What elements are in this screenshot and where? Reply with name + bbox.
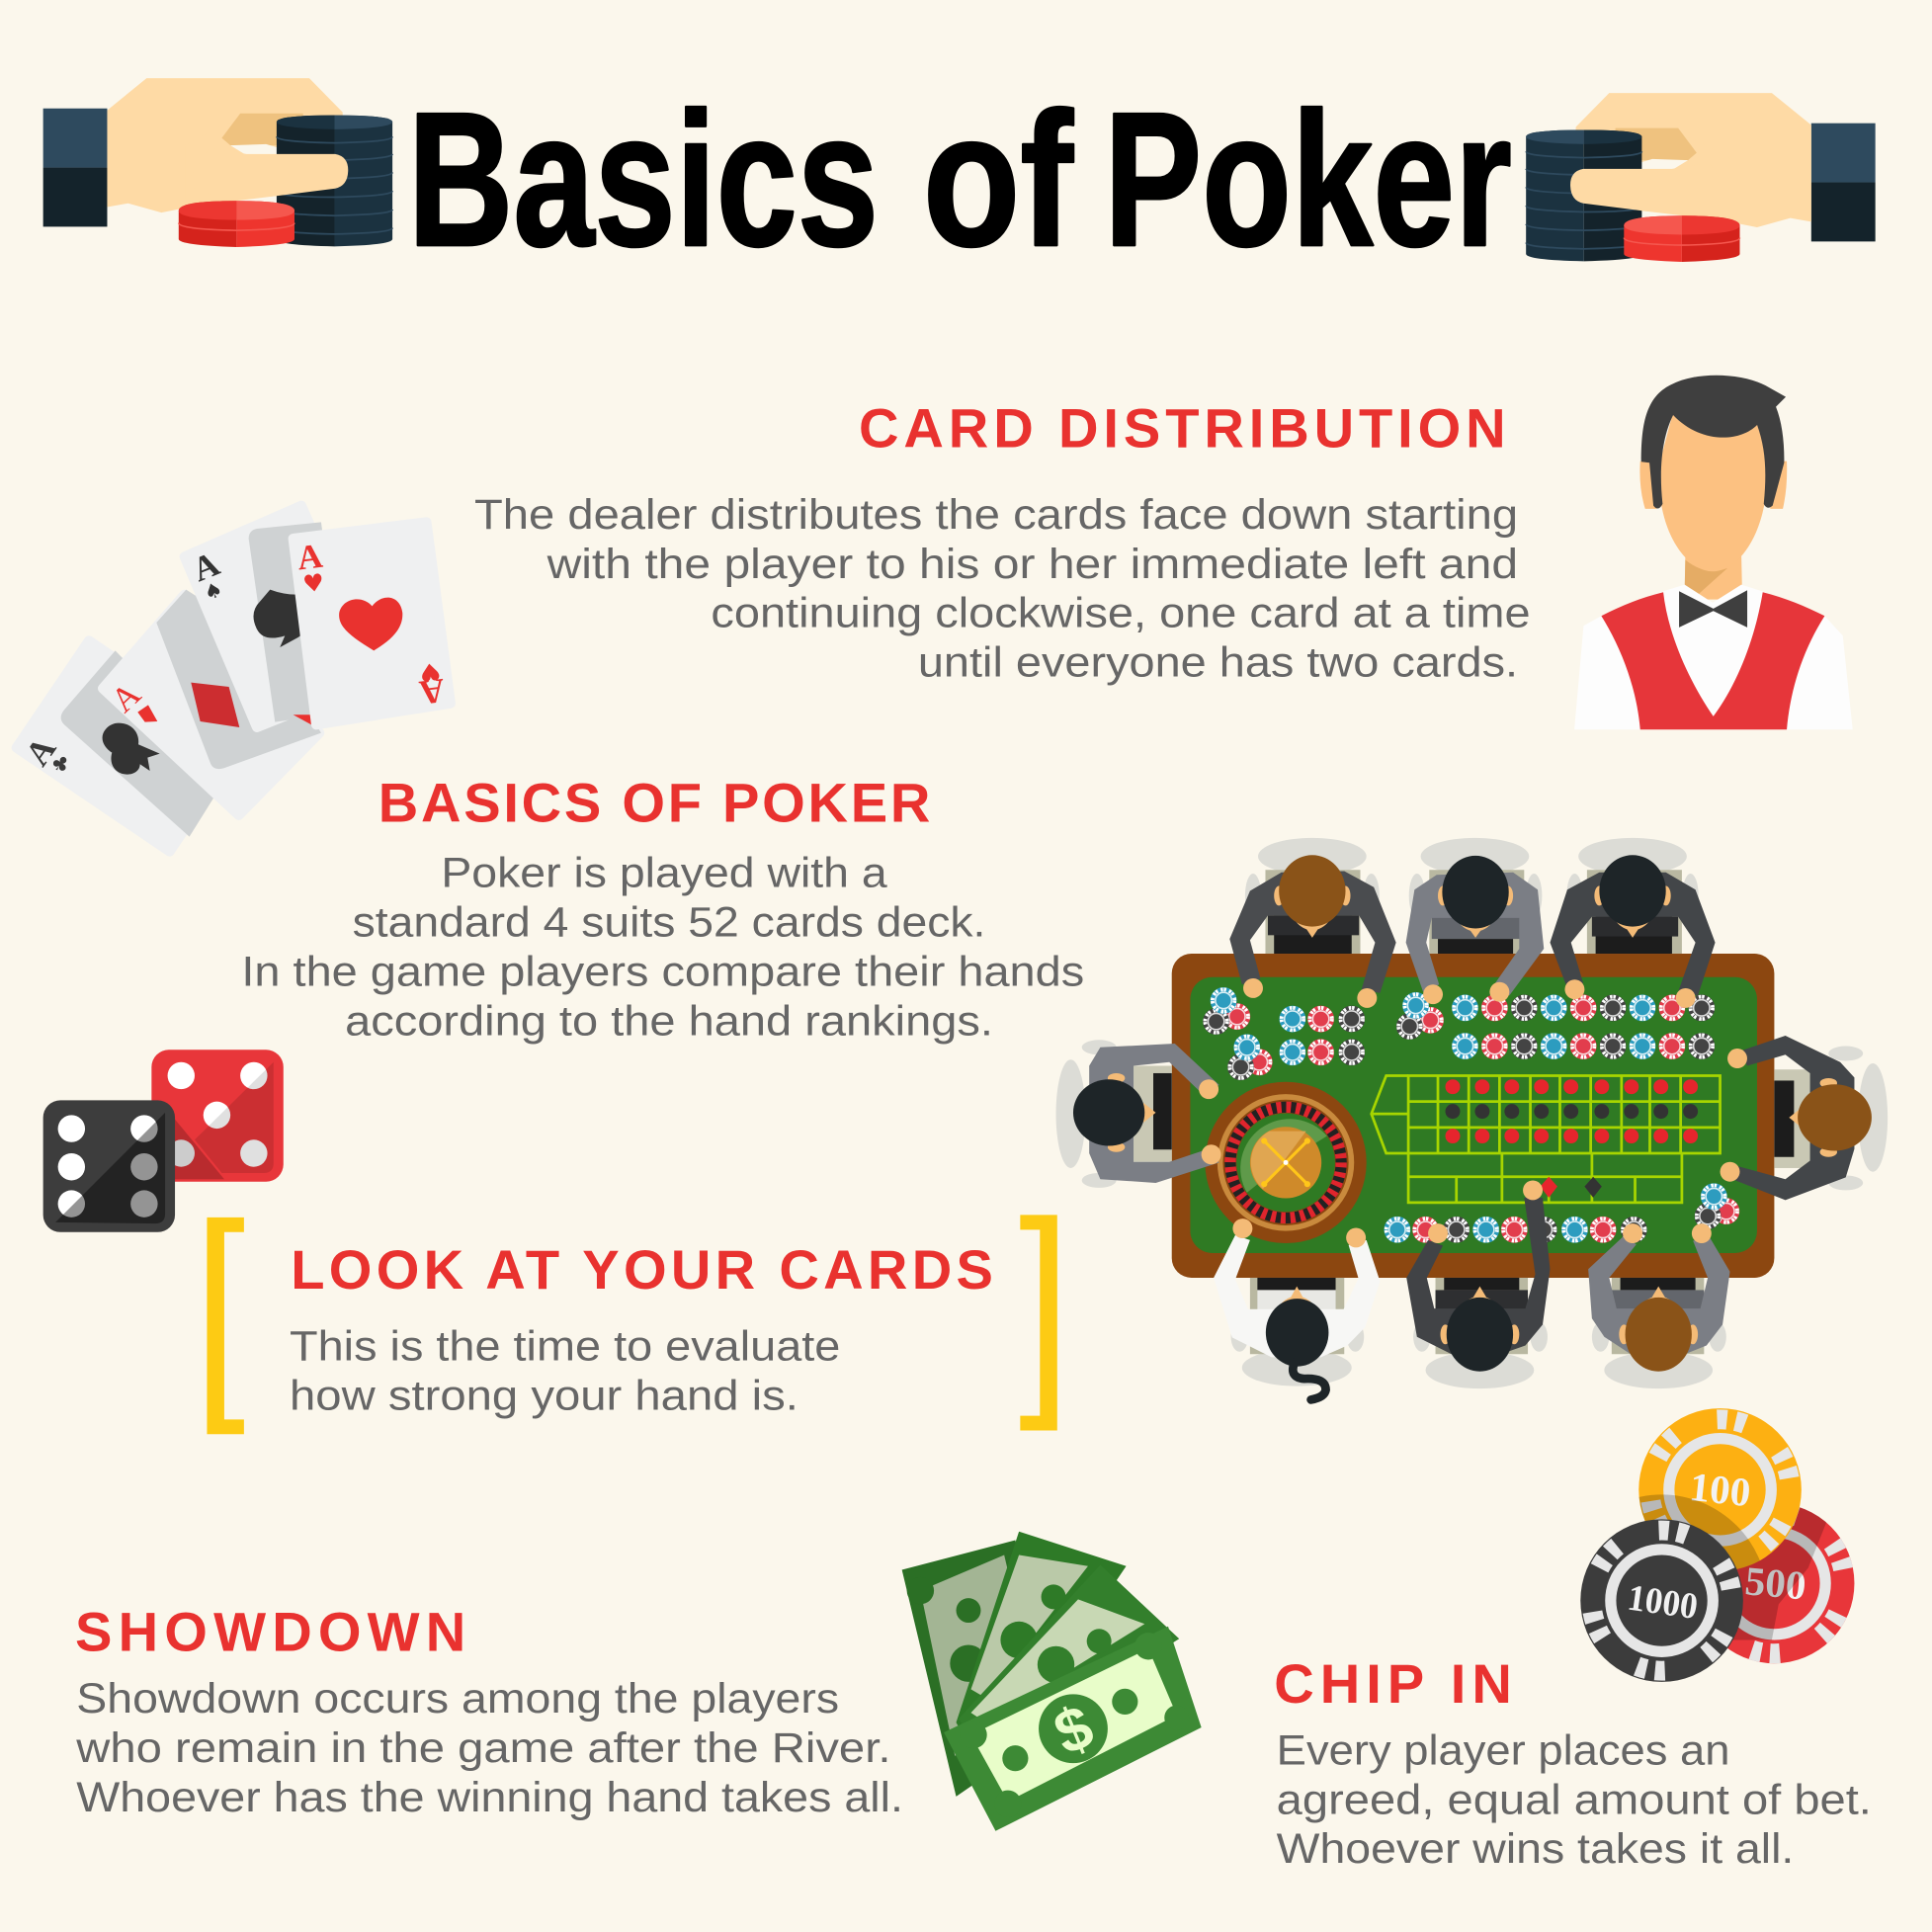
chip 500	[1727, 1507, 1854, 1664]
icon: fan of aces: A	[18, 729, 64, 773]
text: showdown: who remain in the game after the River.	[75, 1724, 890, 1771]
icon: fan of aces: ♣	[46, 749, 75, 779]
heading: card distribution: CARD DISTRIBUTION	[859, 397, 1506, 460]
player: top 2	[1406, 838, 1544, 1004]
chip 1000: 1000	[1625, 1578, 1700, 1628]
icon: dollar bills	[902, 1532, 1202, 1831]
text: chip in: agreed, equal amount of bet.	[1277, 1776, 1872, 1822]
left bracket	[207, 1218, 244, 1434]
text: showdown: Whoever has the winning hand takes all.	[76, 1774, 903, 1820]
icon: casino chips	[1580, 1408, 1854, 1682]
icon: dealer	[1574, 376, 1853, 729]
title: of	[923, 72, 1074, 286]
text: showdown: Showdown occurs among the players	[76, 1675, 839, 1722]
player: bottom 2	[1406, 1180, 1550, 1388]
text: basics of poker: according to the hand rankings.	[345, 997, 993, 1044]
icon: right hand with chips	[1526, 93, 1876, 262]
heading: showdown: SHOWDOWN	[75, 1601, 465, 1663]
text: basics of poker: standard 4 suits 52 cards deck.	[353, 899, 985, 946]
text: showdown	[75, 1675, 903, 1820]
roulette wheel	[1205, 1082, 1367, 1243]
icon: red die	[151, 1050, 284, 1182]
text: chip in	[1277, 1726, 1872, 1872]
icon: fan of aces: A	[187, 544, 225, 589]
text: card distribution: The dealer distributes the cards face down starting	[474, 491, 1518, 538]
text: basics of poker: In the game players compare their hands	[241, 948, 1084, 994]
icon: fan of aces: A	[417, 671, 447, 713]
betting dots	[1446, 1079, 1698, 1198]
text: card distribution: until everyone has two cards.	[918, 638, 1518, 685]
title: Poker	[1104, 72, 1512, 286]
icon: fan of aces: ♥	[301, 568, 326, 599]
player: left	[1056, 1040, 1221, 1188]
player: bottom 1 with ponytail	[1214, 1218, 1380, 1399]
right bracket	[1020, 1215, 1057, 1431]
heading: basics of poker: BASICS OF POKER	[378, 772, 930, 834]
player: right	[1721, 1036, 1888, 1200]
text: look at your cards: how strong your hand is.	[290, 1372, 798, 1418]
poker table with players	[1056, 838, 1888, 1399]
text: look at your cards: This is the time to evaluate	[290, 1322, 840, 1369]
betting layout	[1372, 1075, 1721, 1203]
text: chip in: Every player places an	[1277, 1726, 1730, 1773]
title	[408, 72, 1512, 286]
icon: dollar bills: $	[1046, 1693, 1103, 1769]
icon: black die	[43, 1100, 175, 1232]
icon: fan of aces: A	[104, 674, 148, 719]
heading: chip in: CHIP IN	[1274, 1652, 1512, 1715]
text: card distribution: with the player to his or her immediate left and	[546, 541, 1518, 587]
table top	[1172, 954, 1774, 1278]
icon: fan of aces: A	[295, 537, 325, 577]
icon: fan of aces	[17, 506, 451, 852]
player: top 1	[1229, 838, 1396, 1008]
text: basics of poker	[241, 850, 1084, 1044]
player: top 3	[1550, 838, 1716, 1008]
table chips	[1203, 987, 1739, 1243]
chip 100: 100	[1687, 1464, 1753, 1515]
icon: left hand with chips	[43, 78, 392, 247]
icon: fan of aces: ♠	[201, 577, 226, 605]
chip 1000	[1571, 1510, 1752, 1691]
text: card distribution: continuing clockwise, one card at a time	[711, 590, 1531, 636]
text: look at your cards	[290, 1322, 840, 1418]
title: Basics	[408, 72, 879, 286]
heading: look at your cards: LOOK AT YOUR CARDS	[291, 1238, 993, 1301]
text: chip in: Whoever wins takes it all.	[1277, 1825, 1794, 1872]
chip 100	[1638, 1408, 1802, 1569]
text: basics of poker: Poker is played with a	[441, 850, 887, 896]
text: card distribution	[474, 491, 1531, 685]
icon: fan of aces: ♥	[418, 656, 443, 687]
player: bottom 3	[1588, 1223, 1730, 1388]
chip 500: 500	[1743, 1557, 1807, 1608]
